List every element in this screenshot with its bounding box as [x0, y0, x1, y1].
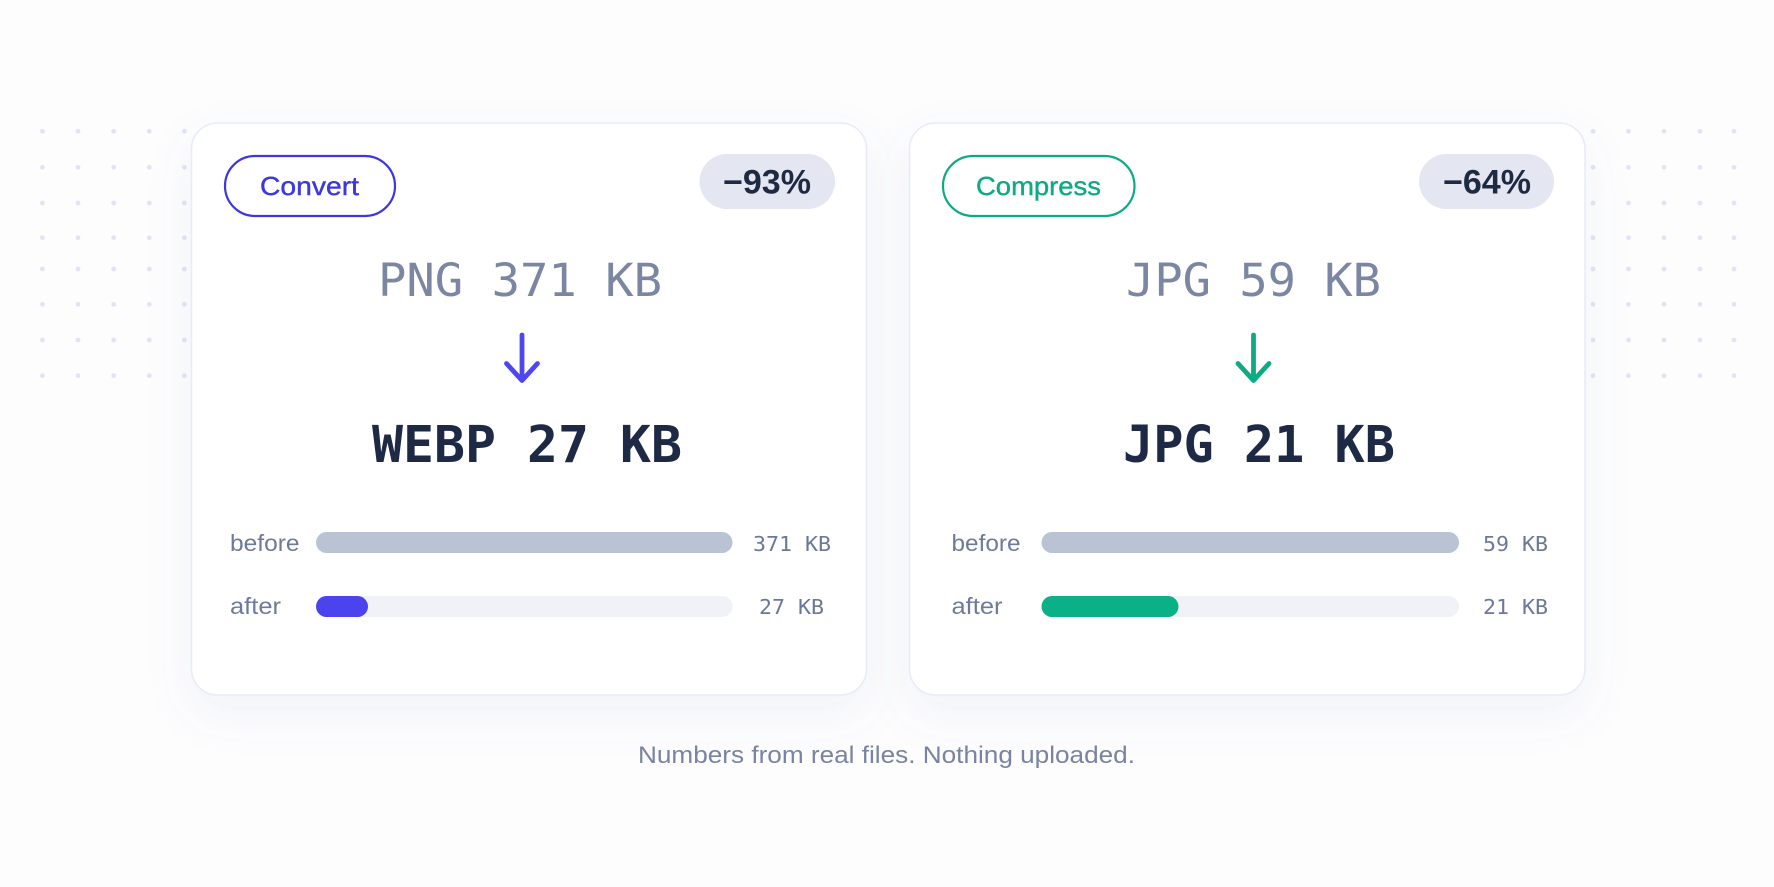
- original size: PNG 371 KB: [378, 254, 662, 307]
- after row: after: [230, 593, 281, 619]
- badge: -64%: [1419, 154, 1554, 209]
- badge: -93%: −93%: [723, 164, 811, 202]
- arrow: down: [506, 335, 538, 380]
- panel: convert: [192, 123, 866, 695]
- before row: [952, 530, 1548, 556]
- before row: before: [230, 530, 300, 556]
- panel: compress: [910, 123, 1585, 695]
- before row: before: [952, 530, 1020, 556]
- original size: JPG 59 KB: [1126, 254, 1381, 307]
- after row: 21 KB: [1483, 595, 1548, 619]
- pill: Compress: [943, 156, 1134, 216]
- after row: [230, 593, 824, 619]
- dot pattern right: [1591, 129, 1736, 378]
- card background: [910, 123, 1585, 695]
- pill: Convert: Convert: [260, 171, 360, 201]
- footer note: Numbers from real files. Nothing uploaded.: [638, 742, 1135, 769]
- before row: 371 KB: [753, 532, 831, 556]
- after row: [952, 593, 1548, 619]
- dot pattern left: [40, 129, 187, 378]
- pill: Convert: [225, 156, 395, 216]
- pill: Compress: Compress: [976, 171, 1101, 201]
- before row: 59 KB: [1483, 532, 1548, 556]
- after row: 27 KB: [759, 595, 824, 619]
- arrow: down: [1238, 335, 1269, 380]
- before row: [230, 530, 831, 556]
- badge: -93%: [700, 154, 835, 209]
- after row: after: [952, 593, 1003, 619]
- compressed size: JPG 21 KB: [1123, 416, 1395, 475]
- card background: [192, 123, 866, 695]
- badge: -64%: −64%: [1443, 164, 1531, 202]
- converted size: WEBP 27 KB: [372, 416, 682, 475]
